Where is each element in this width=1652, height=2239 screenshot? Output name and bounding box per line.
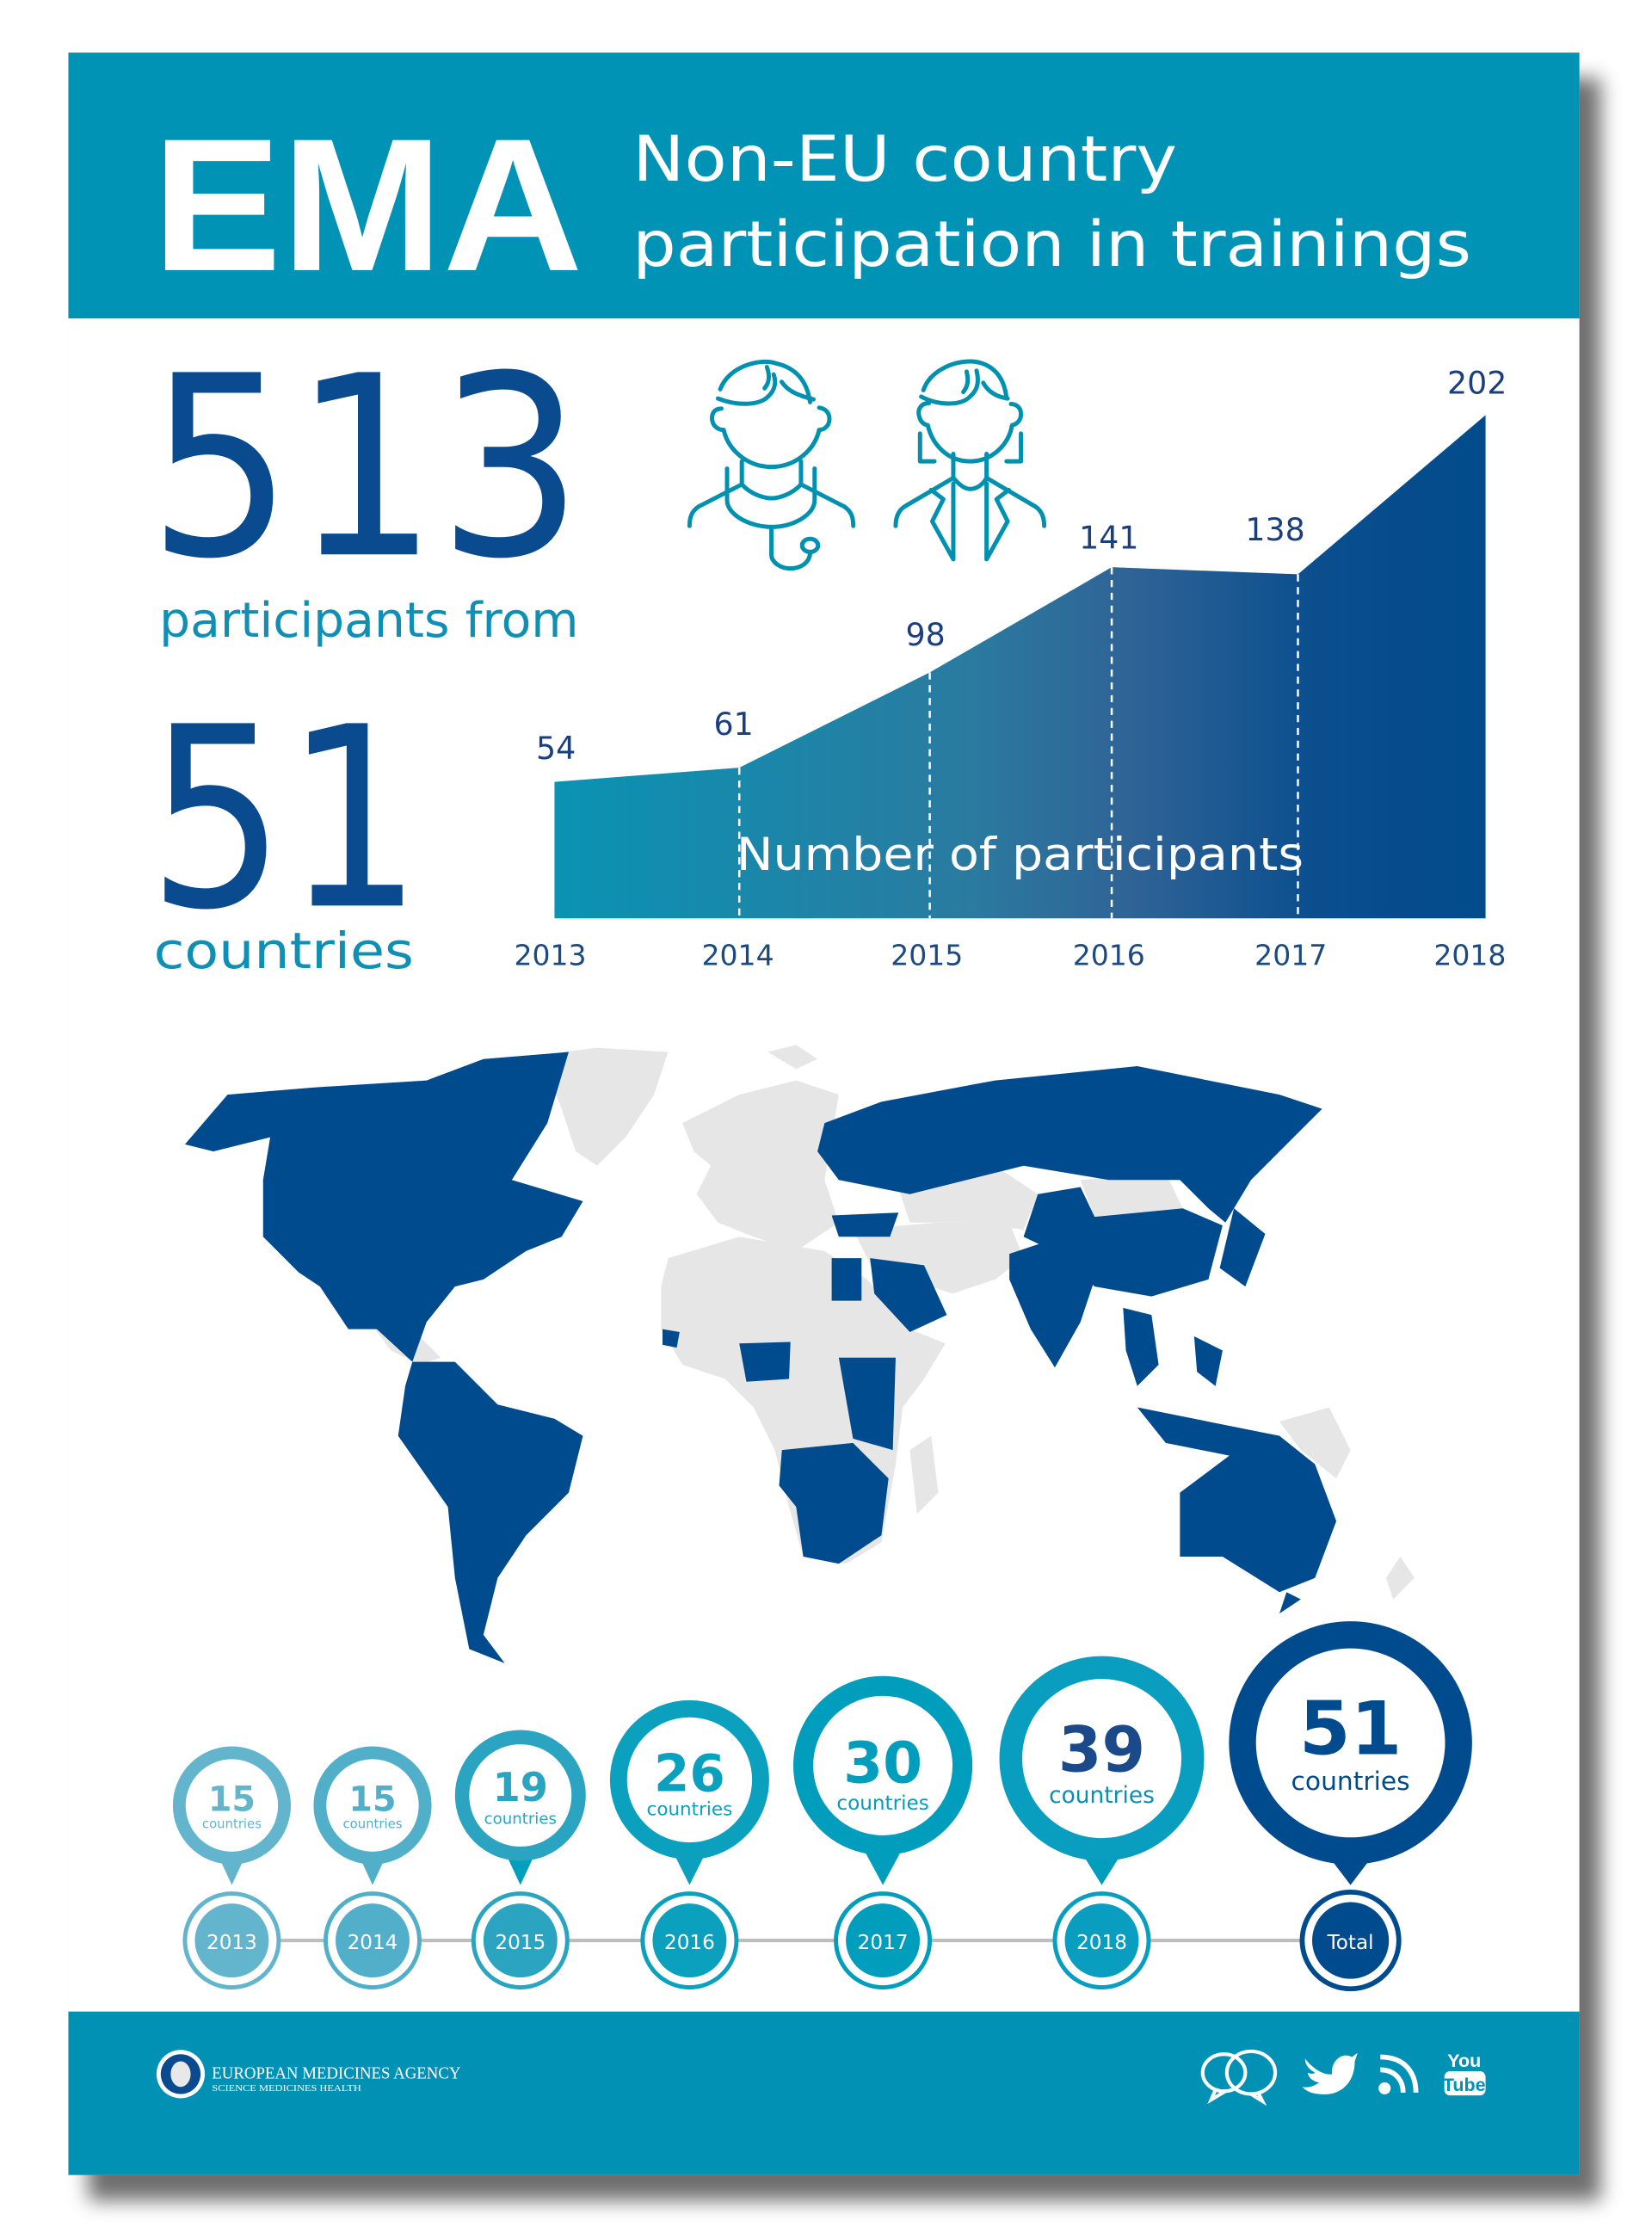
stat: 51 countries: countries — [154, 922, 414, 980]
value labels: 61 — [713, 706, 754, 743]
bubble: 2015 — [462, 1737, 579, 1988]
stat: 51 countries: 51 — [148, 673, 422, 965]
bubble: 2014: countries — [342, 1816, 403, 1832]
blue countries — [185, 1052, 1336, 1663]
world map — [185, 1045, 1415, 1663]
bubble: 2013: 15 — [208, 1780, 256, 1820]
icons: social — [1203, 2051, 1275, 2101]
grey land — [370, 1045, 1415, 1600]
icon: doctor with stethoscope — [689, 361, 854, 569]
year axis labels: 2017 — [1254, 939, 1327, 972]
year axis labels: 2013 — [514, 939, 587, 972]
icon: twitter — [1302, 2053, 1358, 2094]
chart label: Number of participants — [737, 829, 1304, 881]
stat: 513 participants: participants from — [159, 593, 579, 649]
bubble: total: Total — [1327, 1932, 1374, 1954]
year axis labels: 2018 — [1433, 939, 1506, 972]
bubble: 2013 — [179, 1753, 285, 1988]
bubble: 2015: countries — [484, 1810, 557, 1829]
value labels: 138 — [1245, 511, 1305, 548]
icon: youtube: You — [1447, 2051, 1481, 2071]
logo: European Medicines Agency: SCIENCE MEDICINES HEALTH — [212, 2083, 361, 2094]
bubble: 2017: 2017 — [858, 1932, 908, 1954]
footer band — [68, 2012, 1580, 2175]
bubble: 2017: countries — [836, 1792, 929, 1815]
bubble: 2014: 2014 — [348, 1932, 398, 1954]
year axis labels: 2016 — [1073, 939, 1145, 972]
bubble: 2016: 26 — [654, 1745, 725, 1804]
icon: rss — [1380, 2057, 1416, 2093]
logo: European Medicines Agency — [157, 2050, 460, 2098]
icon: youtube — [1443, 2051, 1486, 2095]
bubble: 2013: 2013 — [206, 1932, 257, 1954]
icon: youtube: Tube — [1443, 2075, 1486, 2095]
bubble: 2018: 39 — [1058, 1714, 1145, 1786]
value labels: 54 — [536, 730, 576, 767]
bubble: 2015: 19 — [493, 1764, 548, 1810]
value labels: 202 — [1447, 365, 1507, 402]
area chart: number of participants — [514, 365, 1507, 972]
title: EMA: EMA — [152, 99, 583, 311]
bubble: total: countries — [1291, 1767, 1410, 1797]
bubble: 2013: countries — [202, 1816, 262, 1832]
subtitle: participation in trainings — [632, 209, 1471, 281]
value labels — [536, 365, 1507, 767]
logo: European Medicines Agency: EUROPEAN MEDICINES AGENCY — [212, 2063, 460, 2082]
bubble: 2015: 2015 — [495, 1932, 546, 1954]
bubble: 2017: 30 — [843, 1730, 922, 1797]
value labels: 141 — [1079, 520, 1138, 557]
header band — [68, 52, 1580, 318]
icon: doctor in coat — [896, 361, 1045, 559]
bubble: total — [1242, 1635, 1458, 1989]
timeline connector line — [231, 1940, 1351, 1941]
bubble: 2018: 2018 — [1076, 1932, 1127, 1954]
value labels: 98 — [906, 616, 946, 653]
bubble: 2018 — [1011, 1668, 1193, 1988]
subtitle: Non-EU country — [632, 124, 1177, 196]
stat: 513 participants: 513 — [148, 322, 583, 614]
bubble: 2017 — [804, 1686, 963, 1988]
bubble: 2016: countries — [647, 1799, 732, 1821]
year axis labels — [514, 939, 1506, 972]
bubble: 2016: 2016 — [664, 1932, 715, 1954]
bubble: total: 51 — [1299, 1687, 1402, 1773]
year axis labels: 2014 — [702, 939, 774, 972]
year axis labels: 2015 — [891, 939, 963, 972]
bubble: 2018: countries — [1049, 1782, 1155, 1809]
bubble: 2014: 15 — [348, 1780, 397, 1820]
bubble: 2016 — [619, 1709, 761, 1988]
bubble: 2014 — [320, 1753, 425, 1988]
